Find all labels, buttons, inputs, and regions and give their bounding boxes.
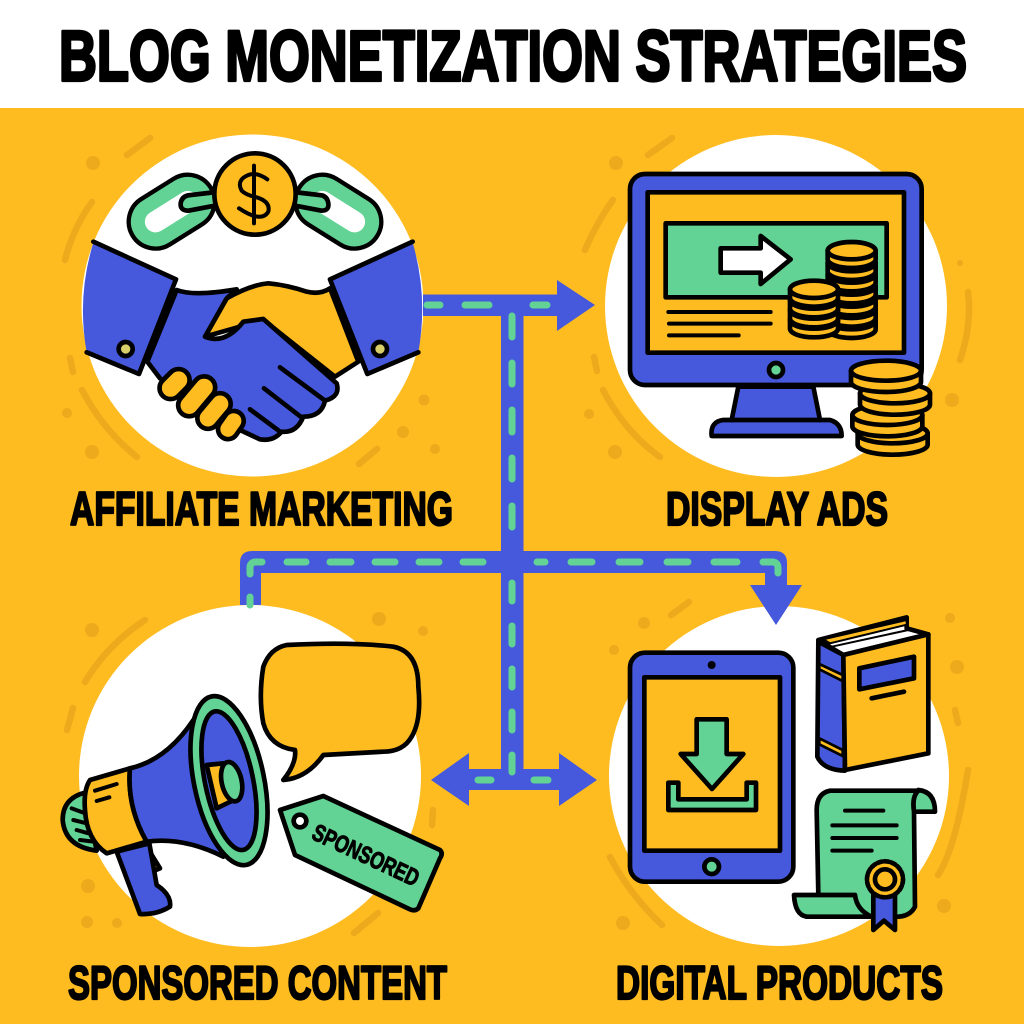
panel: display ads circle bbox=[605, 135, 947, 477]
icon: chain links bbox=[131, 177, 379, 246]
megaphone bell bbox=[130, 720, 223, 857]
icon: megaphone, speech bubble and tag bbox=[63, 644, 442, 914]
label: display ads: DISPLAY ADS bbox=[666, 482, 888, 535]
megaphone handle bbox=[117, 843, 170, 914]
ad banner bbox=[666, 223, 887, 297]
label: affiliate marketing: AFFILIATE MARKETING bbox=[70, 482, 453, 535]
sponsored tag bbox=[280, 796, 442, 910]
panel: affiliate marketing circle bbox=[82, 134, 424, 476]
megaphone end cap bbox=[63, 793, 97, 851]
speech bubble bbox=[261, 644, 419, 780]
monitor body bbox=[630, 174, 922, 385]
coin stacks bbox=[790, 242, 930, 455]
right sleeve bbox=[330, 243, 422, 374]
arrow network bbox=[240, 280, 802, 806]
text lines bbox=[668, 312, 771, 335]
panel: sponsored content circle bbox=[79, 605, 421, 947]
icon: dollar coin bbox=[214, 153, 296, 235]
left sleeve bbox=[83, 243, 176, 374]
megaphone rim bbox=[177, 689, 281, 872]
label: sponsored content: SPONSORED CONTENT bbox=[68, 956, 447, 1009]
power button bbox=[769, 363, 783, 377]
yellow hand bbox=[205, 283, 358, 377]
panel: digital products circle bbox=[609, 606, 949, 946]
icon: handshake with chain and coin bbox=[83, 153, 422, 443]
icon: monitor with coins bbox=[630, 174, 930, 455]
yellow fingers bbox=[155, 365, 248, 443]
cuff outlines and buttons bbox=[87, 242, 418, 374]
sponsored tag: SPONSORED bbox=[308, 819, 423, 892]
megaphone body bbox=[85, 768, 147, 853]
book bbox=[817, 617, 928, 771]
screen bbox=[648, 192, 904, 353]
tablet bbox=[630, 653, 793, 882]
ribbon seal bbox=[867, 861, 903, 930]
monitor stand bbox=[711, 387, 842, 436]
arrow bbox=[721, 236, 791, 284]
title band bbox=[0, 0, 1024, 108]
blue hand bbox=[147, 289, 337, 440]
certificate scroll bbox=[794, 790, 935, 917]
icon: tablet, book and certificate bbox=[630, 617, 935, 930]
